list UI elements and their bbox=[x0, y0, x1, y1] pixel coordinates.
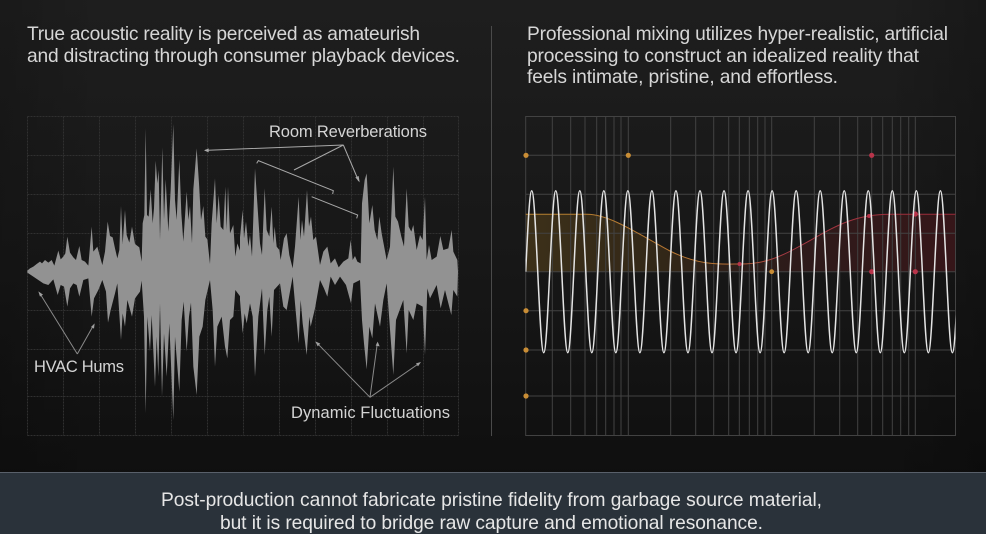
orange control points bbox=[523, 153, 774, 399]
panel: raw waveform bbox=[27, 116, 459, 436]
left intro text: True acoustic reality is perceived as amateurish bbox=[27, 24, 420, 45]
automation envelope line bbox=[526, 214, 956, 264]
label: HVAC Hums: HVAC Hums bbox=[34, 358, 124, 376]
noisy waveform bbox=[27, 124, 458, 420]
center divider bbox=[491, 26, 492, 436]
right intro text: Professional mixing utilizes hyper-realistic, artificial bbox=[527, 24, 948, 45]
panel: conclusion band bbox=[0, 472, 986, 534]
automation envelope fill bbox=[526, 214, 956, 272]
annotation leaders: dynamic fluctuations bbox=[315, 341, 421, 397]
conclusion text: but it is required to bridge raw capture and emotional resonance. bbox=[220, 513, 763, 534]
raw panel grid bbox=[28, 116, 458, 436]
annotation leaders: HVAC hums bbox=[38, 291, 95, 354]
conclusion text: Post-production cannot fabricate pristine fidelity from garbage source material, bbox=[161, 490, 822, 511]
annotation leaders: room reverberations bbox=[204, 145, 360, 218]
label: Dynamic Fluctuations: Dynamic Fluctuations bbox=[291, 404, 450, 422]
pure sine wave bbox=[526, 191, 958, 353]
left intro text bbox=[27, 24, 460, 67]
right intro text: feels intimate, pristine, and effortless. bbox=[527, 67, 838, 88]
right intro text: processing to construct an idealized reality that bbox=[527, 46, 920, 67]
right intro text bbox=[527, 24, 948, 88]
label: Room Reverberations: Room Reverberations bbox=[269, 123, 427, 141]
red control points bbox=[738, 153, 918, 274]
conclusion text bbox=[161, 490, 822, 534]
left intro text: and distracting through consumer playback devices. bbox=[27, 46, 460, 67]
processed panel grid bbox=[526, 116, 956, 436]
panel: processed waveform bbox=[523, 116, 958, 436]
